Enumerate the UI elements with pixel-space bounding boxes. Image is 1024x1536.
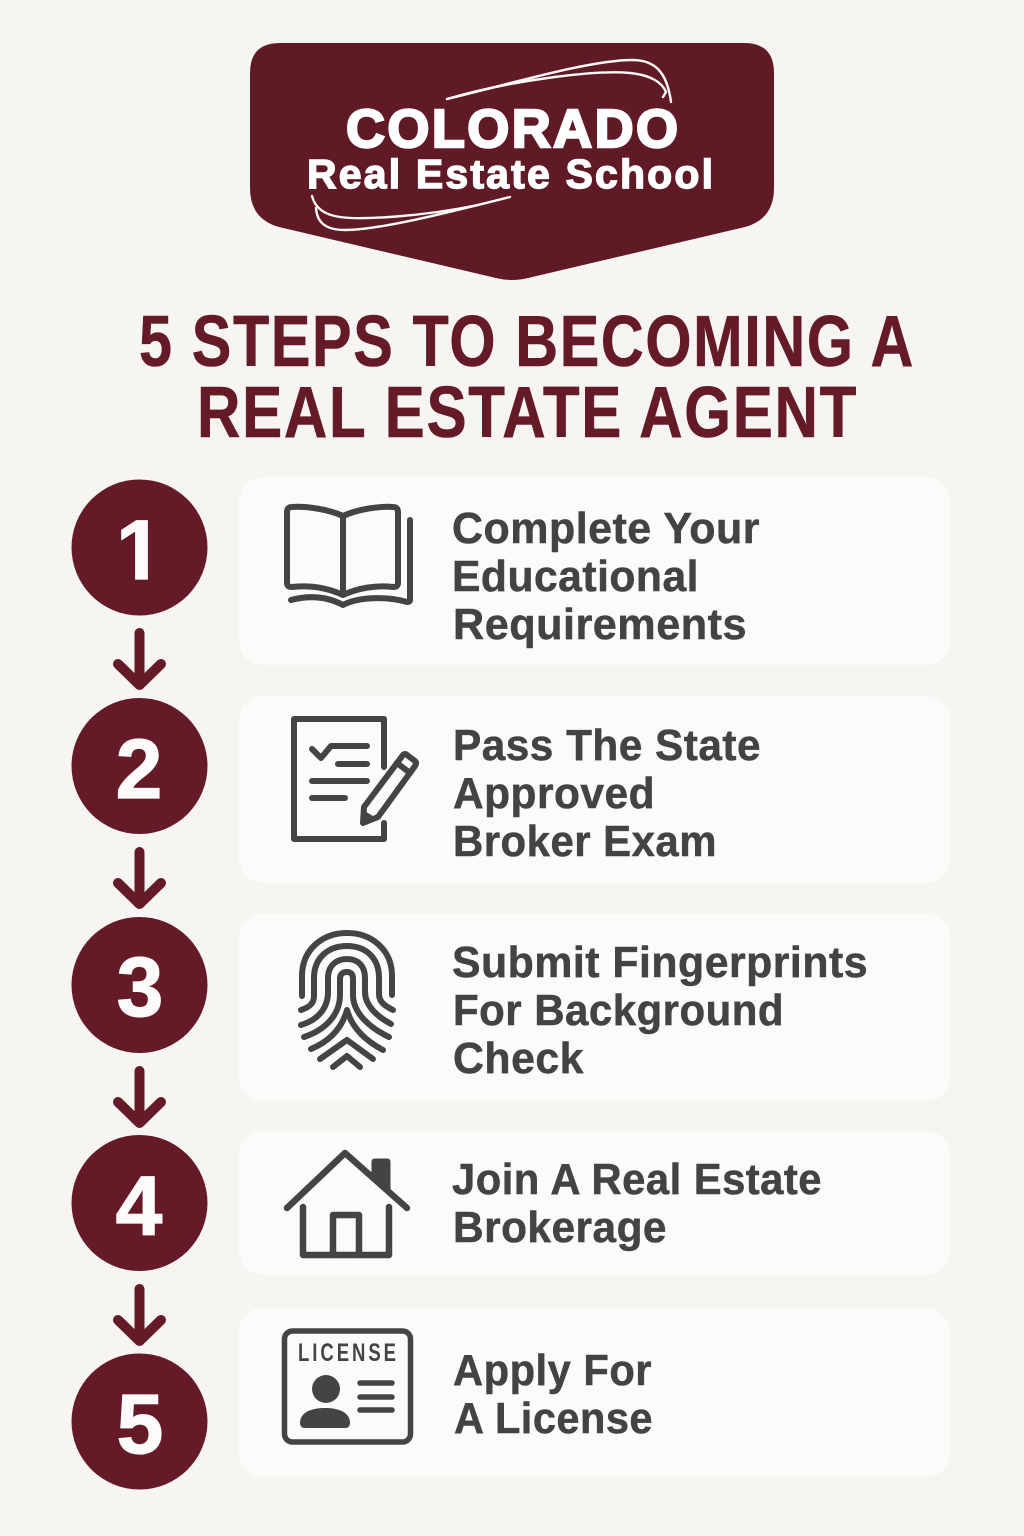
arrow: step 3 to 4 [118,1071,161,1123]
step number 5 [72,1354,208,1490]
logo swoosh: top [447,60,671,102]
step 3 text: For Background [453,986,784,1035]
step 3 text [452,938,868,1083]
step number 5: 5 [117,1377,163,1471]
panel: step 4 [239,1131,950,1275]
step 2 text: Broker Exam [453,817,717,866]
panel: step 2 [239,696,950,883]
arrow: step 4 to 5 [118,1289,161,1341]
step number 3 [72,917,208,1053]
step number 4: 4 [116,1159,163,1253]
step 2 text: Pass The State [453,721,761,770]
step number 1 [72,480,208,616]
step 4 text: Join A Real Estate [452,1155,822,1204]
logo swoosh: bottom [312,196,510,230]
step 4 text [452,1155,822,1252]
step number 2: 2 [116,722,162,816]
arrow: step 2 to 3 [118,852,161,904]
step 2 text: Approved [453,769,655,818]
logo name: Real Estate School: Real Estate School [307,151,713,197]
step 5 text: A License [454,1394,653,1443]
logo name: Colorado: COLORADO [346,99,678,159]
icon: checklist and pencil [294,719,416,839]
step 5 text [453,1346,653,1443]
step 4 text: Brokerage [453,1203,667,1252]
icon: license card: LICENSE [298,1339,399,1367]
icon: fingerprint [301,933,393,1067]
logo badge [250,43,774,280]
title [139,302,915,453]
step 1 text: Requirements [453,600,747,649]
step 1 text [452,504,760,649]
step number 4 [72,1135,208,1271]
step 1 text: Educational [452,552,699,601]
step 3 text: Check [453,1034,584,1083]
panel: step 1 [239,477,950,665]
step number 1: 1 [116,503,163,597]
panel: step 3 [239,914,950,1101]
icon: open book [287,507,410,605]
panel: step 5 [239,1308,950,1477]
step number 2 [72,698,208,834]
step number 3: 3 [117,940,163,1034]
step 2 text [453,721,761,866]
title: REAL ESTATE AGENT [197,373,858,453]
step 3 text: Submit Fingerprints [452,938,868,987]
icon: house [287,1153,407,1255]
icon: license card [284,1331,410,1442]
step 1 text: Complete Your [452,504,760,553]
step 5 text: Apply For [453,1346,652,1395]
arrow: step 1 to 2 [118,633,161,685]
